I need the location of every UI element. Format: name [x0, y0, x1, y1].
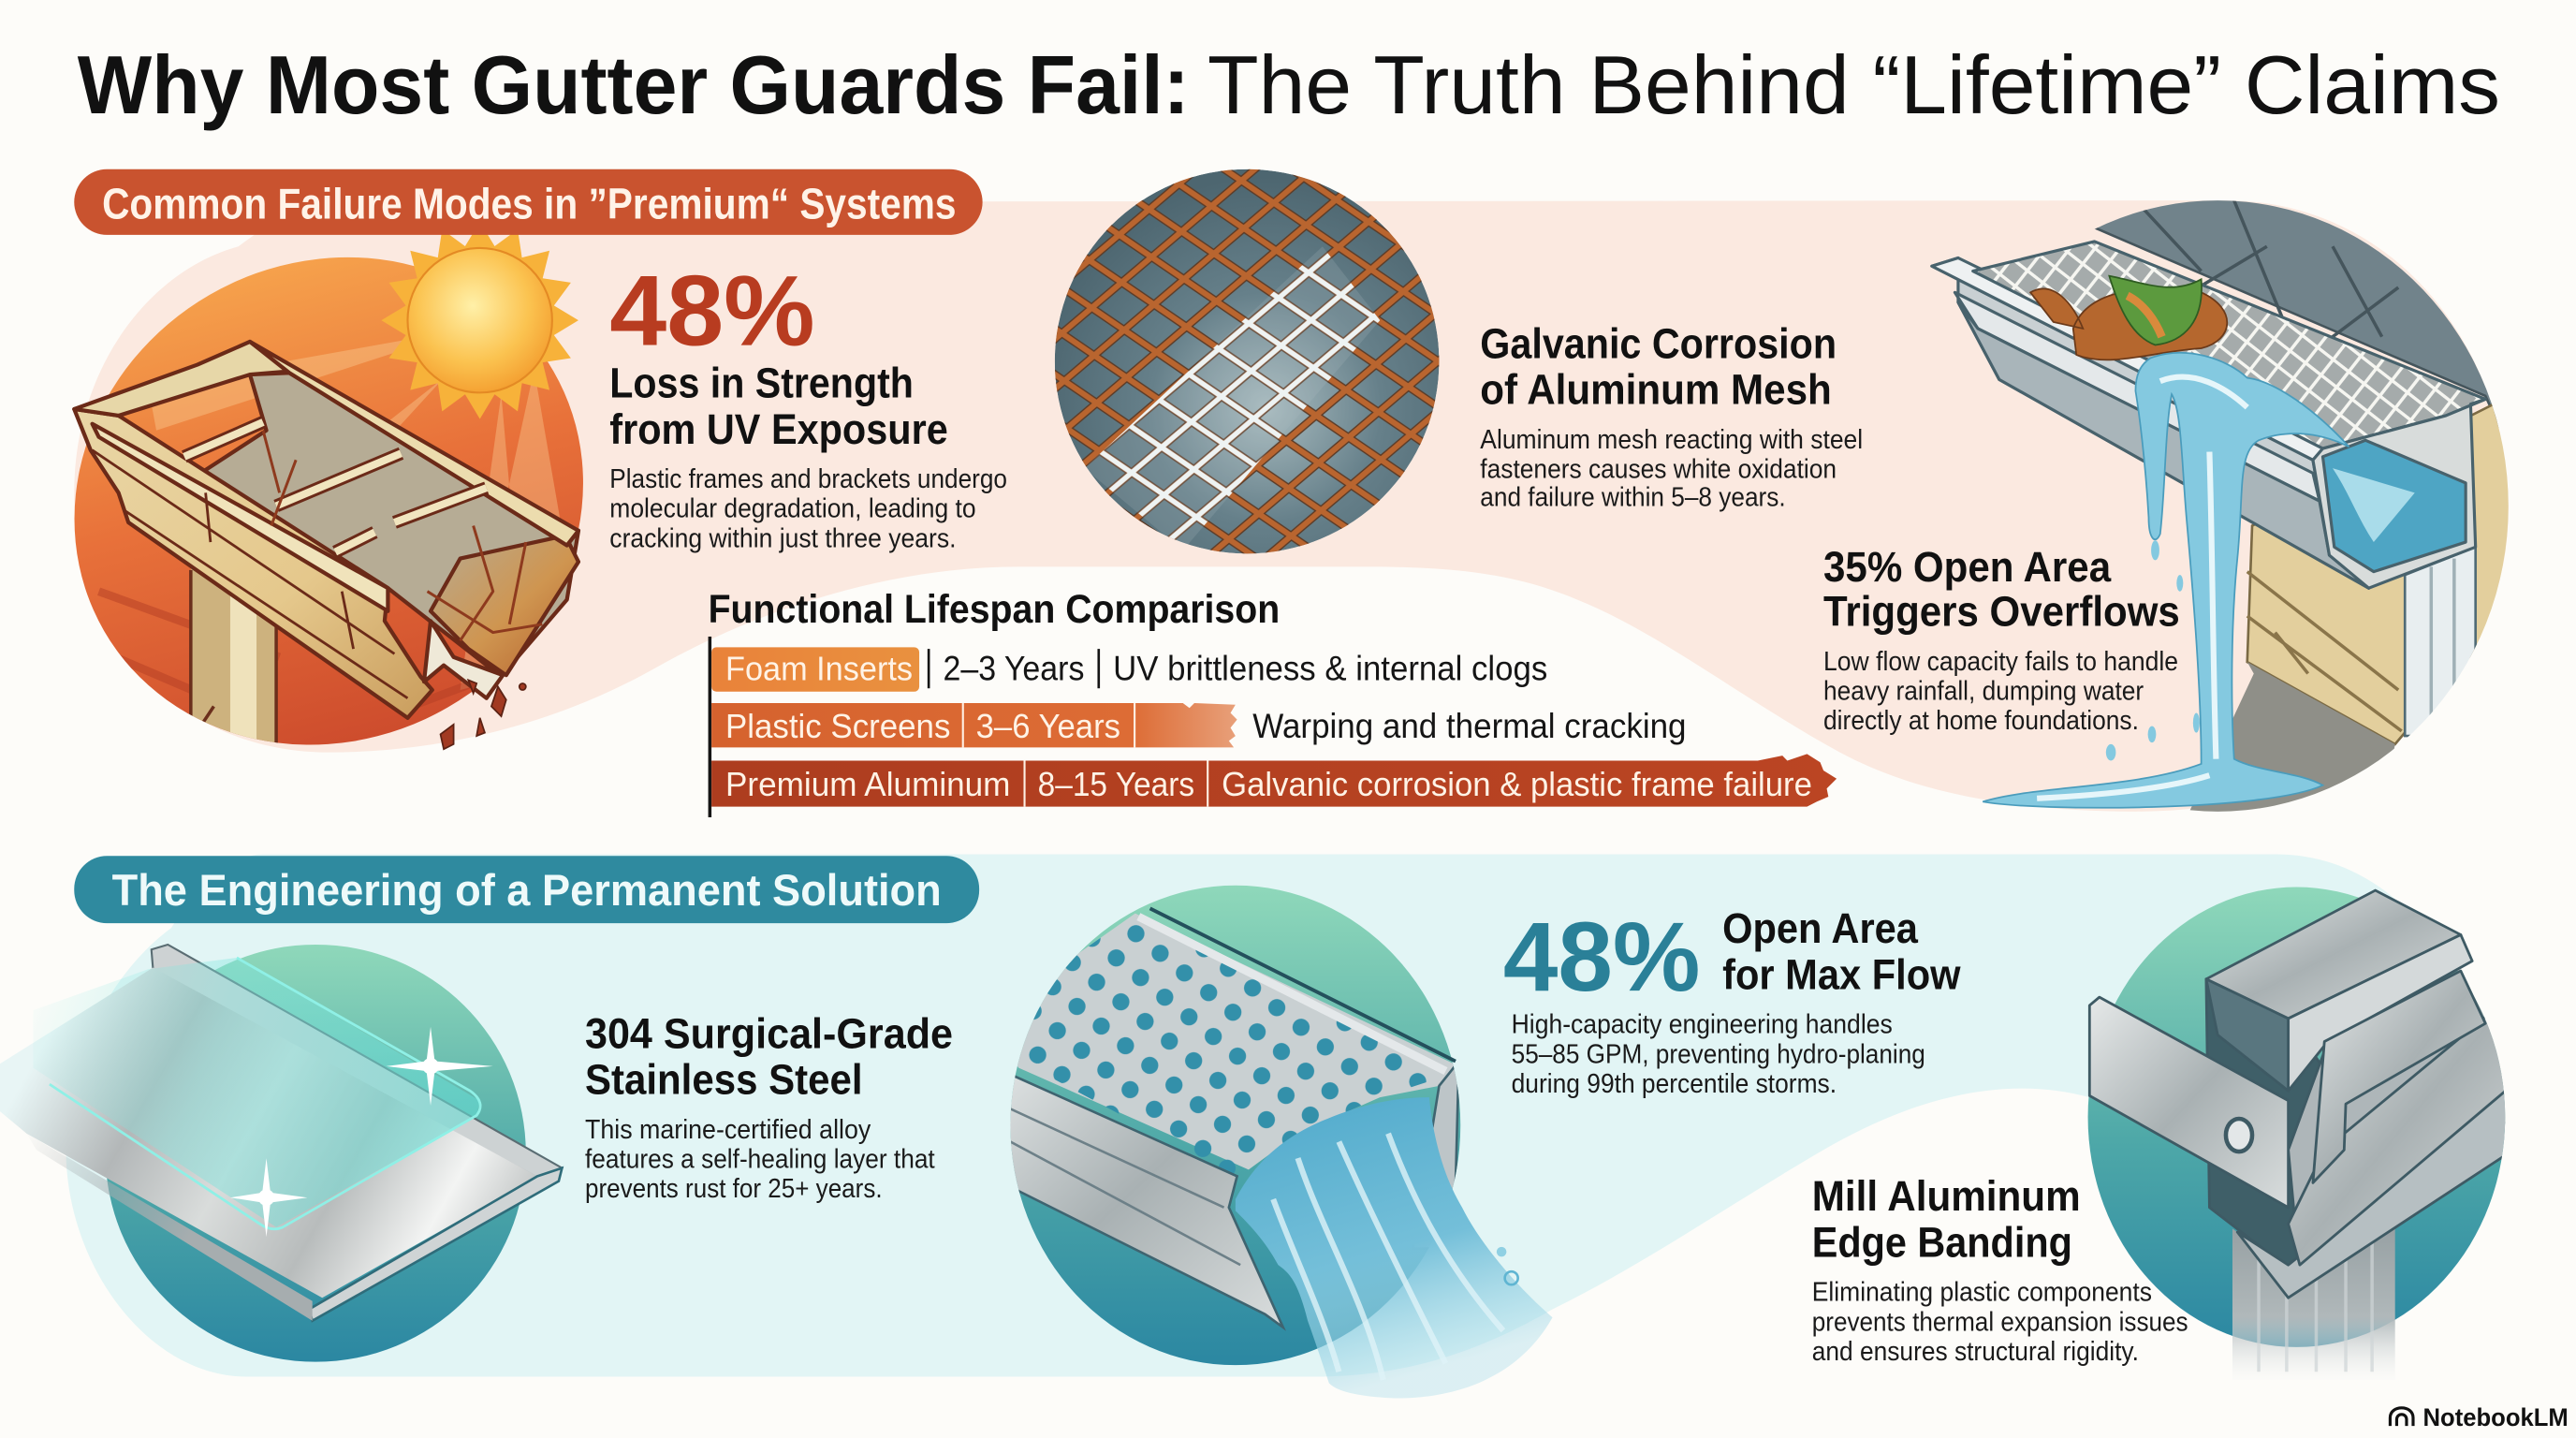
protective glass layer — [33, 958, 480, 1229]
illustration: aluminum edge banding — [2088, 888, 2513, 1380]
text: open area overflow: 35% Open Area — [1823, 543, 2112, 591]
stat: UV strength loss: molecular degradation, leading to — [609, 494, 976, 524]
text: galvanic corrosion: Galvanic Corrosion — [1480, 320, 1837, 368]
sparkles — [230, 1027, 493, 1237]
chart: functional lifespan comparison: Functional Lifespan Comparison — [709, 587, 1280, 632]
shingles — [2095, 200, 2499, 428]
water stream — [1236, 1097, 1553, 1399]
illustration: perforated gutter guard — [986, 886, 1553, 1399]
text: stainless steel: features a self-healing layer that — [585, 1145, 935, 1175]
text: galvanic corrosion: fasteners causes white oxidation — [1480, 455, 1837, 485]
text: open area overflow: Low flow capacity fails to handle — [1823, 647, 2178, 677]
panel: engineering background — [66, 854, 2431, 1376]
text: open area overflow — [1823, 543, 2180, 736]
stat: open area: High-capacity engineering handles — [1512, 1010, 1893, 1040]
bar: plastic screens: Warping and thermal cracking — [1252, 707, 1687, 745]
stat: UV strength loss: Plastic frames and brackets undergo — [609, 464, 1007, 494]
text: stainless steel: Stainless Steel — [585, 1056, 863, 1104]
text: edge banding: Edge Banding — [1812, 1218, 2072, 1266]
text: edge banding: Eliminating plastic components — [1812, 1278, 2152, 1308]
stat: UV strength loss: from UV Exposure — [609, 405, 948, 453]
text: edge banding — [1812, 1172, 2188, 1367]
logo: NotebookLM: NotebookLM — [2423, 1402, 2569, 1431]
chart: functional lifespan comparison — [709, 587, 1837, 817]
stat: open area — [1503, 902, 1961, 1099]
text: open area overflow: Triggers Overflows — [1823, 588, 2180, 636]
text: stainless steel: 304 Surgical-Grade — [585, 1010, 953, 1058]
water overflow — [1983, 353, 2415, 808]
debris fragments — [441, 680, 526, 749]
illustration: sun-cracked plastic gutter — [72, 234, 583, 751]
stat: UV strength loss: Loss in Strength — [609, 360, 914, 407]
text: galvanic corrosion: Aluminum mesh reacting with steel — [1480, 425, 1863, 455]
bar: foam inserts: Foam Inserts — [725, 649, 913, 687]
text: stainless steel: prevents rust for 25+ years. — [585, 1174, 883, 1204]
stat: UV strength loss — [609, 254, 1007, 553]
text: galvanic corrosion: and failure within 5–8 years. — [1480, 482, 1786, 512]
leaf debris — [2030, 276, 2227, 360]
text: galvanic corrosion: of Aluminum Mesh — [1480, 366, 1832, 414]
bar: premium aluminum: Premium Aluminum — [725, 765, 1010, 803]
sun — [381, 222, 578, 418]
illustration: stainless steel channel — [0, 945, 562, 1362]
bar: plastic screens: 3–6 Years — [976, 707, 1120, 745]
bar: premium aluminum — [711, 754, 1837, 807]
bar: plastic screens — [711, 703, 1687, 747]
stat: open area: during 99th percentile storms. — [1512, 1069, 1837, 1099]
text: edge banding: and ensures structural rigidity. — [1812, 1337, 2139, 1367]
stat: open area: Open Area — [1722, 904, 1919, 952]
illustration: overflowing gutter — [1927, 189, 2530, 825]
section header: engineering: The Engineering of a Permanent Solution — [112, 866, 942, 916]
bar: plastic screens: Plastic Screens — [725, 707, 950, 745]
text: stainless steel — [585, 1010, 953, 1204]
bar: foam inserts: UV brittleness & internal clogs — [1113, 649, 1547, 687]
post — [2232, 1199, 2395, 1380]
stat: open area: for Max Flow — [1722, 950, 1961, 998]
text: edge banding: prevents thermal expansion issues — [1812, 1307, 2188, 1337]
text: edge banding: Mill Aluminum — [1812, 1172, 2081, 1220]
stat: open area: 48% — [1503, 902, 1700, 1012]
title: Why Most Gutter Guards Fail: — [78, 39, 1190, 131]
text: stainless steel: This marine-certified alloy — [585, 1115, 871, 1145]
cracked gutter body — [74, 342, 578, 718]
section header: failure modes: Common Failure Modes in ”Premium“ Systems — [102, 179, 957, 227]
stat: UV strength loss: cracking within just three years. — [609, 523, 957, 553]
bar: premium aluminum: Galvanic corrosion & plastic frame failure — [1222, 765, 1812, 803]
stat: UV strength loss: 48% — [609, 254, 815, 366]
bar: foam inserts — [711, 647, 1547, 692]
section header: failure modes — [74, 169, 983, 235]
gutter body — [1932, 242, 2485, 588]
panel: failure modes background — [74, 200, 2509, 812]
bar: premium aluminum: 8–15 Years — [1038, 765, 1194, 803]
stat: open area: 55–85 GPM, preventing hydro-planing — [1512, 1039, 1925, 1069]
bar: foam inserts: 2–3 Years — [944, 649, 1084, 687]
title — [78, 39, 2500, 131]
illustration: corroded mesh — [1051, 164, 1445, 559]
title: The Truth Behind “Lifetime” Claims — [1208, 39, 2500, 131]
strap with rivet — [2089, 997, 2289, 1208]
text: galvanic corrosion — [1480, 320, 1863, 512]
text: open area overflow: directly at home foundations. — [1823, 706, 2139, 736]
text: open area overflow: heavy rainfall, dumping water — [1823, 677, 2144, 707]
